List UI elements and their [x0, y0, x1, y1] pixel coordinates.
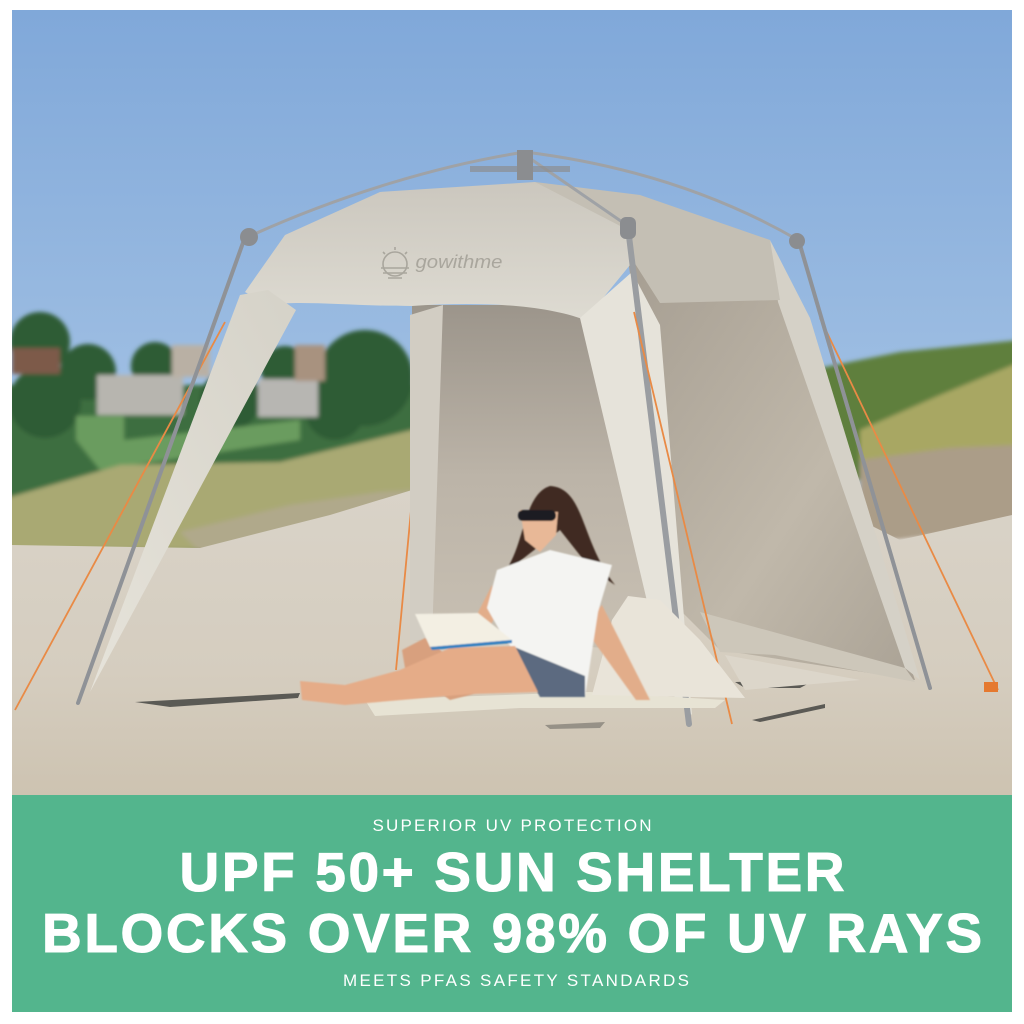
- front-left leg panel: [90, 290, 296, 692]
- hair: [502, 486, 615, 585]
- footer text: MEETS PFAS SAFETY STANDARDS: [343, 971, 689, 990]
- sky: [12, 10, 1012, 530]
- brand logo: gowithme: [416, 252, 502, 272]
- face: [520, 510, 558, 552]
- back-left interior panel: [410, 305, 443, 640]
- pole joints: [240, 150, 805, 249]
- right dune: [824, 337, 1012, 540]
- eyebrow text: SUPERIOR UV PROTECTION: [372, 816, 652, 835]
- frame poles: [78, 155, 930, 724]
- photo: beach scene with sun shelter: [0, 10, 1020, 795]
- right wall lower strip: [700, 612, 915, 682]
- shelter back wall: [412, 305, 660, 650]
- near arm: [478, 586, 494, 624]
- orange centre guy line: [634, 312, 732, 724]
- banner: green text band: [12, 795, 1012, 1012]
- sun mark: [381, 247, 409, 278]
- sunglasses: [518, 510, 556, 521]
- blanket: [365, 692, 725, 716]
- rear frame poles: [250, 152, 798, 240]
- book cover: [430, 640, 512, 650]
- right canopy edge panel: [770, 240, 920, 680]
- front-centre leg panel: [580, 272, 692, 715]
- orange stake: [984, 682, 998, 692]
- heading line 1: UPF 50+ SUN SHELTER: [180, 841, 844, 903]
- left hillside with trees and buildings: [0, 312, 420, 555]
- canopy front: [245, 182, 630, 320]
- canopy right slope: [535, 182, 780, 303]
- heading line 2: BLOCKS OVER 98% OF UV RAYS: [42, 902, 982, 964]
- near leg: [300, 646, 538, 705]
- guy lines: [15, 318, 998, 710]
- brand logo: [381, 247, 502, 278]
- pillow: [592, 596, 745, 698]
- woman: [300, 486, 650, 705]
- sand: [12, 490, 1012, 795]
- book: [415, 613, 512, 647]
- ground shadows: [135, 680, 825, 729]
- shirt: [487, 550, 612, 697]
- sand seen under the right wall: [725, 655, 860, 690]
- far arm: [594, 605, 650, 701]
- right wall: [625, 240, 915, 680]
- shorts: [512, 646, 585, 697]
- far leg: [402, 638, 474, 701]
